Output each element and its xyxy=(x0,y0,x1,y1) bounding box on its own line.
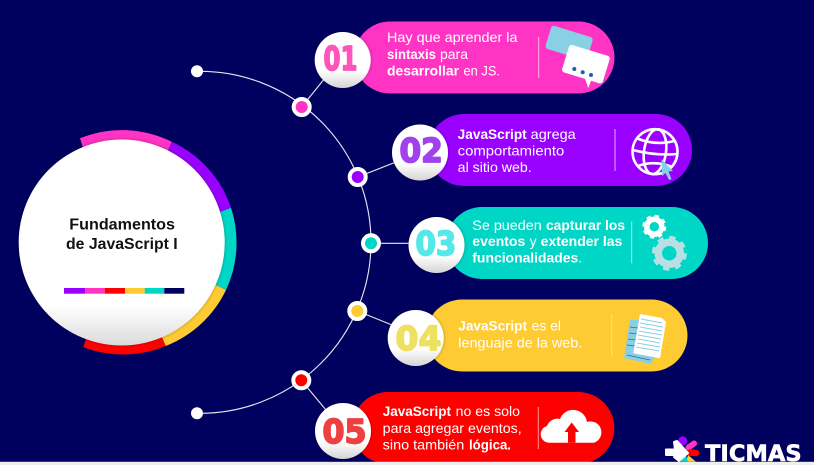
connector: node 4 to badge 04 xyxy=(357,311,392,325)
connector: node 1 to badge 01 xyxy=(302,78,325,107)
title xyxy=(66,216,178,253)
title: de JavaScript I xyxy=(66,236,178,253)
text block: es el xyxy=(532,319,561,334)
icon: small gear xyxy=(644,216,665,237)
text block xyxy=(458,319,582,351)
node: yellow xyxy=(349,303,365,319)
text block: sino también xyxy=(383,437,464,452)
badge 02 xyxy=(392,124,448,180)
text block: no es solo xyxy=(456,404,520,419)
text block: en JS. xyxy=(464,64,500,78)
text block xyxy=(472,218,625,266)
badge 03 xyxy=(408,217,464,273)
node: teal xyxy=(363,235,379,251)
ring: pink segment xyxy=(80,130,172,170)
panel: step 05 xyxy=(315,392,614,464)
panel: step 04 xyxy=(388,300,688,372)
badge 05: 05 xyxy=(322,413,366,451)
badge 03: 03 xyxy=(416,225,456,263)
text block: desarrollar xyxy=(387,64,460,78)
node: pink xyxy=(294,99,310,115)
text block: lógica. xyxy=(469,437,511,452)
badge 01: 01 xyxy=(324,40,358,78)
timeline arc with nodes xyxy=(191,65,410,419)
badge 02: 02 xyxy=(400,132,443,170)
text block: sintaxis xyxy=(387,47,436,62)
ring: yellow segment xyxy=(150,275,226,346)
text block: lenguaje de la web. xyxy=(458,336,582,351)
text block: . xyxy=(578,251,582,266)
connector: node 2 to badge 02 xyxy=(358,162,396,177)
title: Fundamentos xyxy=(69,216,175,233)
icon: cloud upload xyxy=(541,410,601,443)
connector: node 3 to badge 03 xyxy=(371,242,410,244)
icon: documents xyxy=(624,314,666,364)
bottom strip xyxy=(0,462,814,465)
text block: capturar los xyxy=(546,218,625,233)
panel: step 03 xyxy=(408,207,708,279)
text block xyxy=(387,30,518,78)
start dot xyxy=(191,65,203,77)
ring: teal segment xyxy=(195,208,237,290)
panel: step 02 xyxy=(392,114,692,186)
text block: al sitio web. xyxy=(458,160,532,175)
colour bar xyxy=(64,288,184,294)
icon: chat bubbles xyxy=(545,25,610,88)
pill xyxy=(426,300,688,372)
text block xyxy=(458,127,576,175)
text block: para xyxy=(440,47,468,62)
text block: Hay que aprender la xyxy=(387,30,518,45)
end dot xyxy=(191,407,203,419)
text block: extender las xyxy=(541,234,622,249)
ring: purple segment xyxy=(160,142,231,220)
badge 01 xyxy=(315,32,371,88)
text block: comportamiento xyxy=(458,144,564,159)
connector: node 5 to badge 05 xyxy=(301,380,326,410)
pill xyxy=(446,207,708,279)
white disc xyxy=(19,140,225,346)
badge 04: 04 xyxy=(396,320,441,358)
text block xyxy=(383,404,522,452)
text block: funcionalidades xyxy=(472,251,578,266)
central circle panel xyxy=(19,130,237,355)
text block: agrega xyxy=(531,127,576,142)
text block: Se pueden xyxy=(472,218,542,233)
pill xyxy=(428,114,692,186)
node: purple xyxy=(350,169,366,185)
logo mark xyxy=(666,436,696,462)
text block: JavaScript xyxy=(458,127,527,142)
ring: red segment xyxy=(83,310,166,355)
node: red xyxy=(293,372,309,388)
logo: TICMAS xyxy=(666,436,802,465)
text block: JavaScript xyxy=(383,404,451,419)
icon: large gear xyxy=(654,238,685,269)
pill xyxy=(354,22,614,94)
text block: eventos xyxy=(472,234,525,249)
text block: y xyxy=(530,234,537,249)
badge 05 xyxy=(315,403,371,459)
pill xyxy=(352,392,614,464)
panel: step 01 xyxy=(315,22,614,94)
text block: JavaScript xyxy=(458,319,527,334)
badge 04 xyxy=(388,310,444,366)
icon: globe with cursor xyxy=(632,128,678,180)
text block: para agregar eventos, xyxy=(383,421,522,436)
